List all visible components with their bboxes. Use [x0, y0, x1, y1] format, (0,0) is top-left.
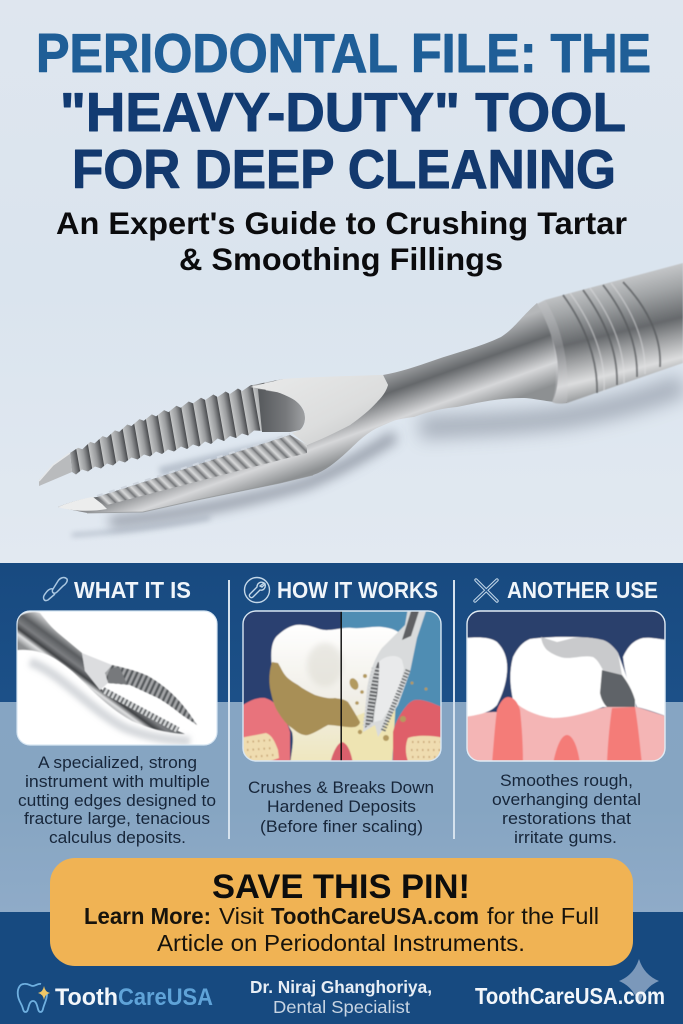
tooth	[271, 625, 407, 764]
description: what it is: calculus deposits.	[49, 828, 186, 847]
handle with knurled rings	[537, 263, 683, 404]
description: how it works: (Before finer scaling)	[260, 817, 423, 836]
gum	[468, 704, 664, 760]
title: FOR DEEP CLEANING	[72, 138, 616, 200]
description: how it works	[248, 778, 434, 836]
brand name: CareUSA	[118, 984, 213, 1011]
filling	[541, 637, 622, 675]
panel: another use	[464, 577, 668, 847]
description: what it is: cutting edges designed to	[18, 791, 216, 810]
heading: how it works: HOW IT WORKS	[277, 577, 438, 603]
icon: crossed tools	[475, 580, 497, 601]
callout body: Visit	[219, 903, 264, 929]
center split line	[340, 611, 342, 761]
card image: overhanging restoration illustration	[464, 608, 668, 764]
gums	[240, 698, 290, 764]
subtitle	[56, 205, 627, 277]
background: dark blue header band	[0, 563, 683, 702]
author credit: Dr. Niraj Ghanghoriya,	[250, 977, 432, 997]
icon: sparkle	[619, 959, 659, 1005]
brand name: Tooth	[55, 984, 118, 1011]
subtitle: An Expert's Guide to Crushing Tartar	[56, 205, 627, 241]
panel: what it is	[17, 577, 217, 847]
author credit: Dental Specialist	[273, 997, 410, 1017]
callout: save this pin	[50, 858, 633, 966]
heading: what it is: WHAT IT IS	[74, 577, 191, 603]
title	[36, 22, 651, 200]
description: what it is: fracture large, tenacious	[24, 809, 210, 828]
brand name	[55, 984, 213, 1011]
title: "HEAVY-DUTY" TOOL	[60, 81, 626, 143]
callout body: ToothCareUSA.com	[271, 903, 479, 929]
description: what it is: instrument with multiple	[25, 772, 210, 791]
callout body	[84, 903, 599, 956]
teeth	[464, 637, 507, 717]
description: another use: irritate gums.	[514, 828, 617, 847]
tartar deposit	[269, 662, 360, 735]
callout body: Article on Periodontal Instruments.	[157, 930, 525, 956]
description: how it works: Crushes & Breaks Down	[248, 778, 434, 797]
right half root tint	[342, 709, 396, 760]
description: another use	[492, 771, 641, 847]
description: what it is: A specialized, strong	[38, 753, 197, 772]
description: how it works: Hardened Deposits	[267, 797, 416, 816]
description: another use: overhanging dental	[492, 790, 641, 809]
card image: instrument close-up	[17, 611, 217, 745]
lower serrated prong	[58, 372, 400, 513]
neck	[377, 303, 580, 428]
divider	[453, 580, 455, 839]
upper serrated prong	[39, 379, 305, 486]
periodontal file instrument photo	[39, 263, 683, 535]
description: what it is	[18, 753, 216, 847]
divider	[228, 580, 230, 839]
icon: tooth logo	[18, 984, 50, 1012]
background: light upper area	[0, 0, 683, 564]
callout body: for the Full	[487, 903, 599, 929]
icon: instrument	[44, 578, 67, 601]
background: dark blue footer band	[0, 912, 683, 1024]
footer	[18, 959, 665, 1017]
author credit	[250, 977, 432, 1017]
description: another use: Smoothes rough,	[500, 771, 633, 790]
callout body: Learn More:	[84, 903, 211, 929]
instrument shadow	[72, 385, 683, 535]
bone	[244, 732, 280, 760]
card image: tartar crushing illustration	[240, 608, 444, 764]
callout heading: SAVE THIS PIN!	[212, 868, 470, 906]
icon: wrench in circle	[244, 578, 270, 602]
debris	[348, 674, 428, 741]
heading: another use: ANOTHER USE	[507, 577, 658, 603]
panel: how it works	[240, 577, 444, 836]
roots	[492, 697, 523, 764]
instrument tip	[363, 608, 427, 737]
description: another use: restorations that	[502, 809, 631, 828]
subtitle: & Smoothing Fillings	[179, 241, 503, 277]
polished head plate	[250, 375, 388, 445]
background: light blue middle band	[0, 702, 683, 912]
